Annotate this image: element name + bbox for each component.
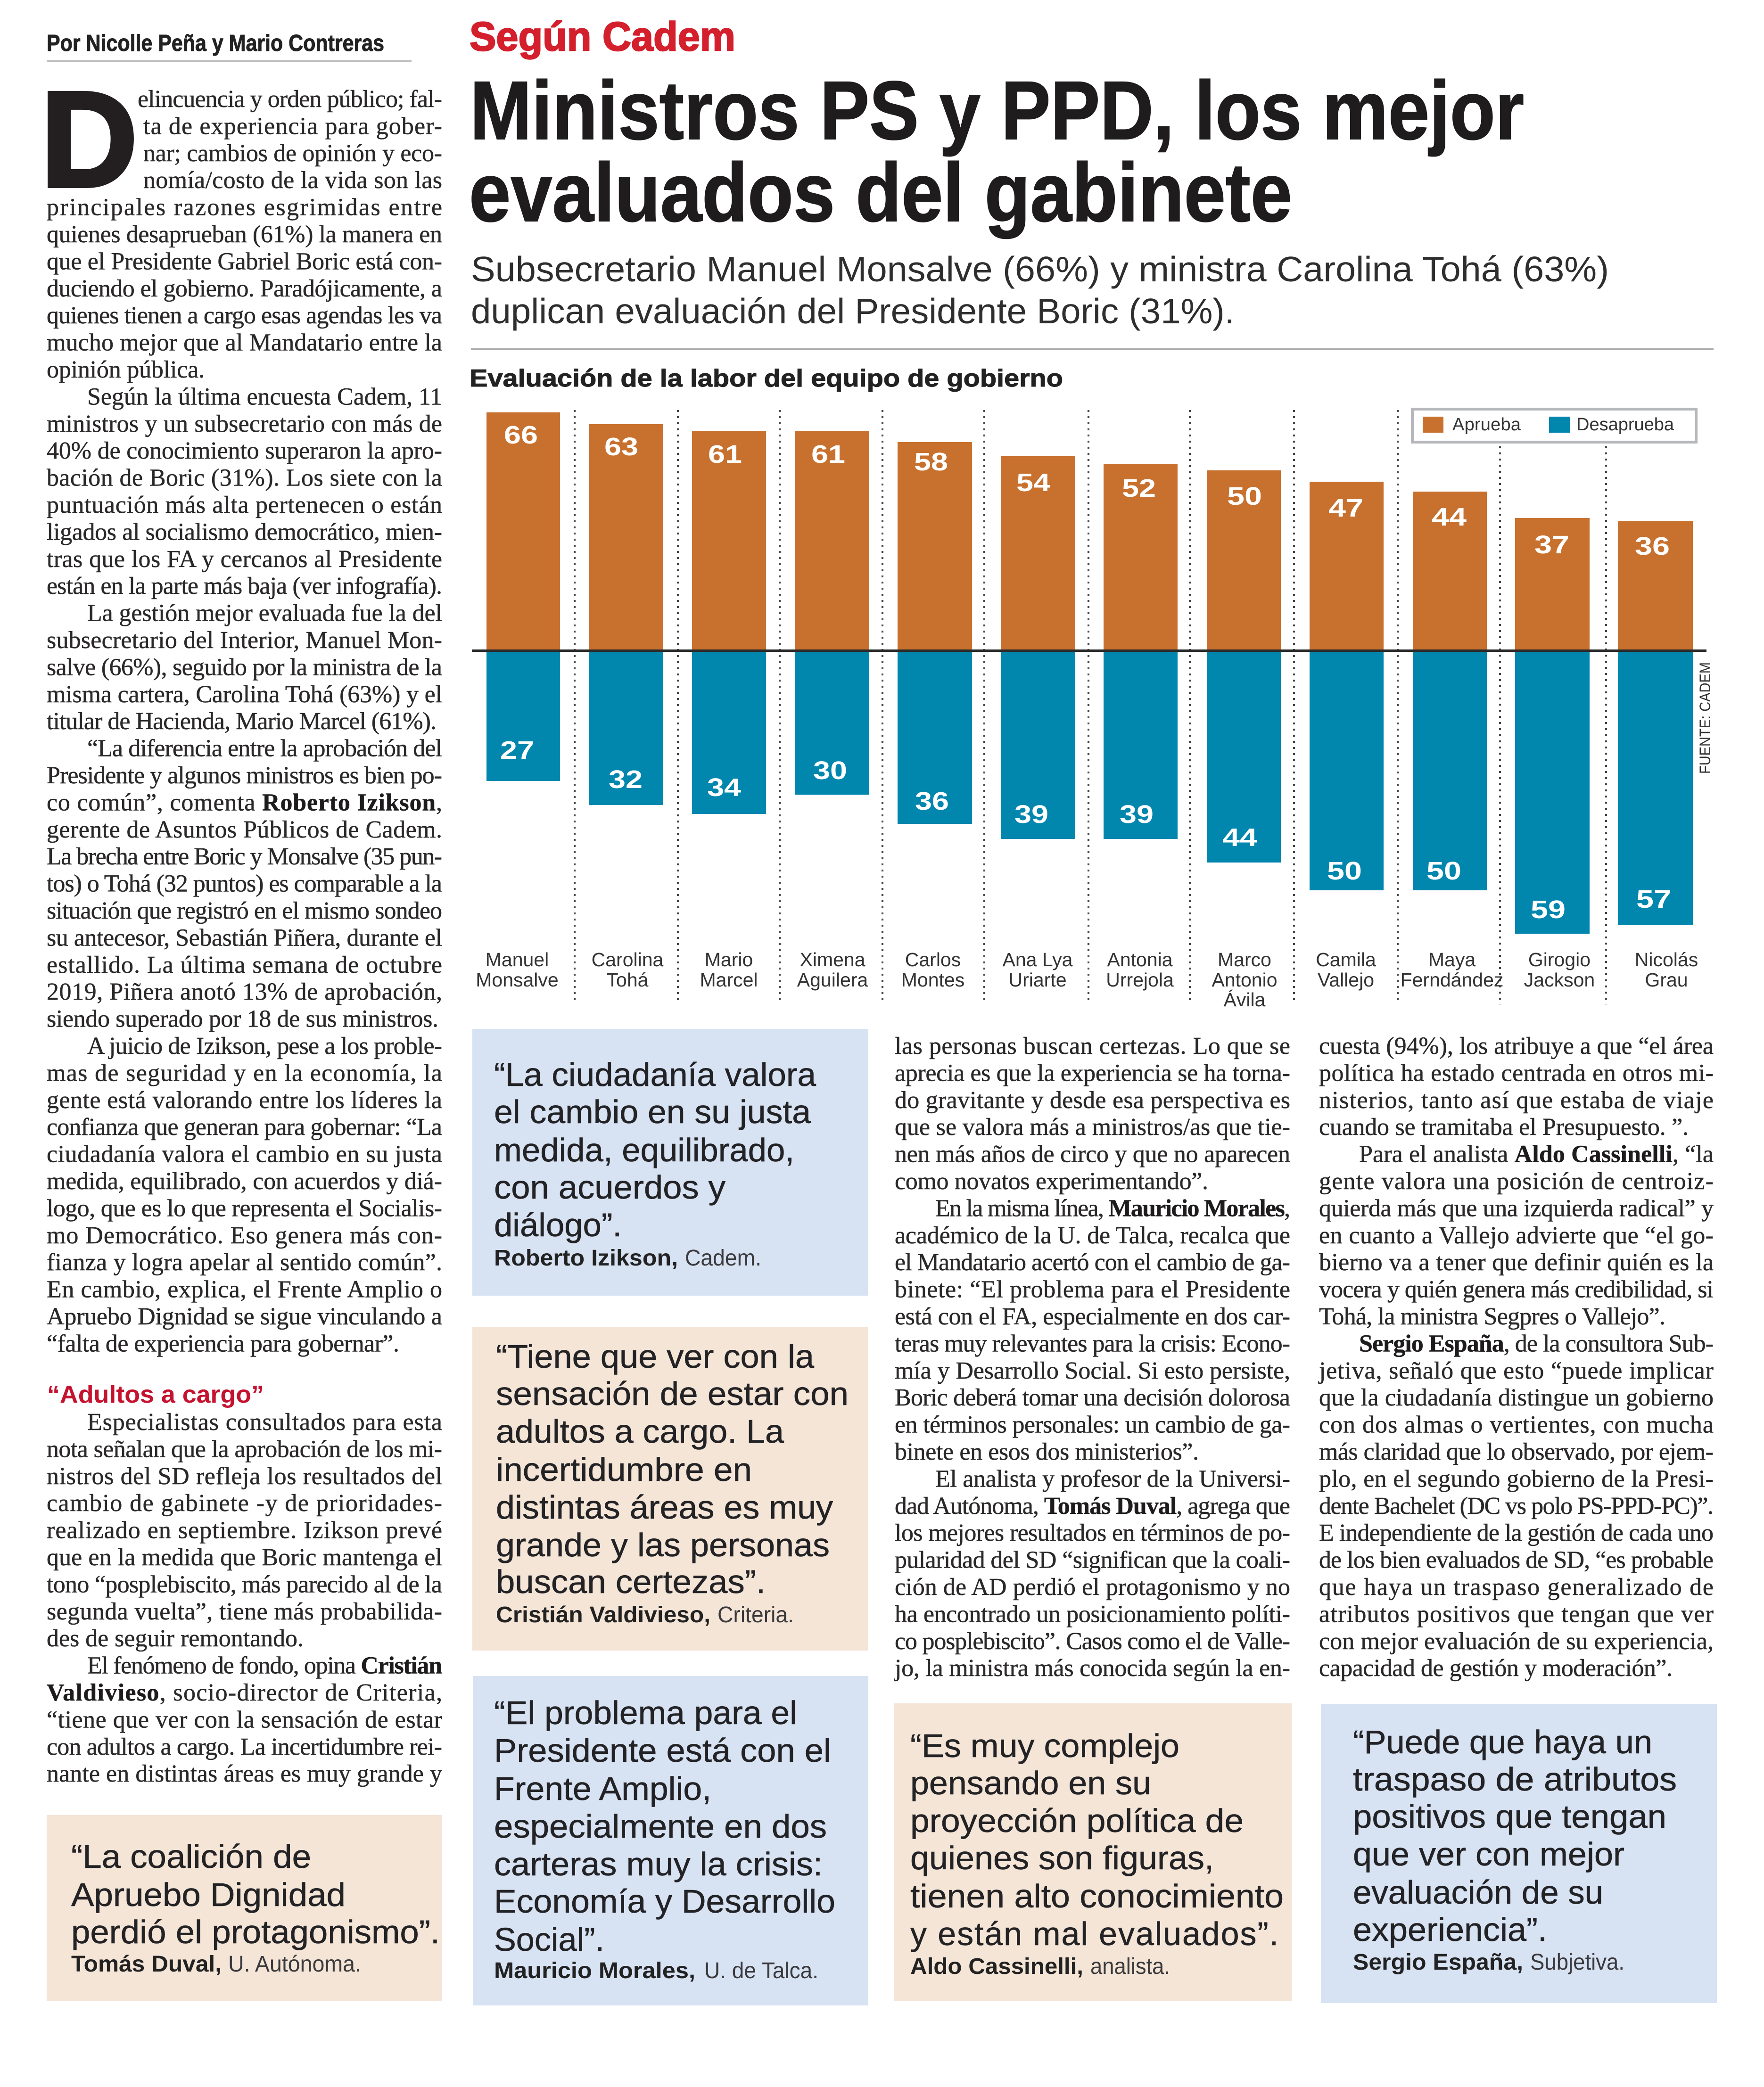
subtitle: duplican evaluación del Presidente Boric (31%). <box>471 291 1235 331</box>
article column 1, top: nar; cambios de opinión y eco- <box>143 140 442 167</box>
article column 3: el Mandatario acertó con el cambio de ga- <box>895 1249 1290 1276</box>
article column 3: que se valora más a ministros/as que tie- <box>895 1114 1290 1141</box>
bar group: Carolina Tohá: Tohá <box>607 969 649 991</box>
article column 1, top: 2019, Piñera anotó 13% de aprobación, <box>47 978 442 1005</box>
article column 1, bottom: segunda vuelta”, tiene más probabilida- <box>47 1598 442 1625</box>
bar group: Ximena Aguilera: Aguilera <box>797 969 868 991</box>
bar group: Maya Ferndández: 50 <box>1426 857 1461 885</box>
article column 1, top: ciudadanía valora el cambio en su justa <box>47 1141 442 1168</box>
subtitle: Subsecretario Manuel Monsalve (66%) y ministra Carolina Tohá (63%) <box>471 249 1609 289</box>
article column 3: en términos personales: un cambio de ga- <box>895 1412 1290 1438</box>
bar group: Manuel Monsalve: Monsalve <box>476 969 559 991</box>
quote box: Mauricio Morales: Mauricio Morales, <box>494 1958 695 1983</box>
article column 1, top: logo, que es lo que representa el Socialis- <box>47 1195 442 1222</box>
article column 4: de los bien evaluados de SD, “es probable <box>1319 1547 1714 1574</box>
bar group: Marco Antonio Ávila: Marco <box>1218 949 1271 970</box>
quote box: Mauricio Morales: Economía y Desarrollo <box>494 1883 835 1920</box>
article column 1, top: co común”, comenta Roberto Izikson, <box>47 789 442 816</box>
article column 4: gente valora una posición de centroiz- <box>1319 1168 1714 1195</box>
chart heading: Evaluación de la labor del equipo de gobierno <box>470 365 1063 392</box>
article column 3: los mejores resultados en términos de po- <box>895 1520 1290 1546</box>
bar group: Carlos Montes: Carlos <box>905 949 961 970</box>
article column 1, top: La brecha entre Boric y Monsalve (35 pun- <box>47 843 442 870</box>
article column 1, top: mo Democrático. Eso genera más con- <box>47 1222 442 1249</box>
article column 3: pularidad del SD “significan que la coali- <box>895 1547 1290 1574</box>
article column 3: académico de la U. de Talca, recalca que <box>895 1222 1290 1249</box>
bar group: Marco Antonio Ávila: 50 <box>1227 482 1262 510</box>
article column 1, top: En cambio, explica, el Frente Amplio o <box>47 1276 442 1303</box>
source note: FUENTE: CADEM <box>1697 662 1714 774</box>
bar group: Carlos Montes: 58 <box>914 448 948 476</box>
article column 3: El analista y profesor de la Universi- <box>935 1465 1290 1492</box>
article column 1, top: siendo superado por 18 de sus ministros. <box>47 1006 438 1033</box>
bar group: Camila Vallejo: 50 <box>1327 857 1362 885</box>
article column 1, top: elincuencia y orden público; fal- <box>138 86 442 113</box>
article column 1, top: titular de Hacienda, Mario Marcel (61%). <box>47 708 437 735</box>
article column 3: ción de AD perdió el protagonismo y no <box>895 1574 1290 1601</box>
title <box>469 65 1524 239</box>
quote box: Aldo Cassinelli: pensando en su <box>910 1765 1151 1801</box>
article column 1, top: puntuación más alta pertenecen o están <box>47 492 442 518</box>
article column 1, top: gente está valorando entre los líderes la <box>47 1087 442 1114</box>
bar group: Antonia Urrejola <box>1104 464 1178 991</box>
article column 1, top: gerente de Asuntos Públicos de Cadem. <box>47 816 442 843</box>
article column 1, top: A juicio de Izikson, pese a los proble- <box>87 1033 442 1060</box>
bar group: Manuel Monsalve <box>476 412 560 991</box>
article column 1, top: “falta de experiencia para gobernar”. <box>47 1330 399 1357</box>
title: evaluados del gabinete <box>469 147 1292 239</box>
quote box: Cristián Valdivieso: “Tiene que ver con la <box>496 1338 814 1375</box>
article column 1, top: Presidente y algunos ministros es bien po- <box>47 762 442 789</box>
bar group: Girogio Jackson: 59 <box>1531 896 1566 924</box>
article column 1, bottom: realizado en septiembre. Izikson prevé <box>47 1517 442 1544</box>
bar group: Ximena Aguilera: 30 <box>813 756 847 785</box>
bar group: Ana Lya Uriarte: 39 <box>1014 800 1048 829</box>
bar group: Antonia Urrejola: 52 <box>1122 474 1156 502</box>
article column 3: teras muy relevantes para la crisis: Econo- <box>895 1330 1290 1357</box>
quote box: Aldo Cassinelli: analista. <box>1090 1954 1170 1979</box>
bar group: Ximena Aguilera: 61 <box>811 440 845 468</box>
article column 3: está con el FA, especialmente en dos car- <box>895 1303 1290 1330</box>
bar group: Carlos Montes <box>898 442 972 991</box>
quote box: Cristián Valdivieso: sensación de estar con <box>496 1375 849 1412</box>
subheading: Adultos a cargo: “Adultos a cargo” <box>47 1381 264 1408</box>
bar group: Camila Vallejo <box>1310 482 1384 991</box>
quote box: Roberto Izikson: el cambio en su justa <box>494 1093 811 1130</box>
article column 4: que la ciudadanía distingue un gobierno <box>1319 1384 1714 1411</box>
quote box: Cristián Valdivieso: Criteria. <box>717 1602 794 1627</box>
quote box: Mauricio Morales: especialmente en dos <box>494 1808 827 1845</box>
bar group: Ana Lya Uriarte <box>1001 456 1075 991</box>
quote box: Aldo Cassinelli: quienes son figuras, <box>910 1840 1214 1876</box>
article column 1, top: mas de seguridad y en la economía, la <box>47 1060 442 1086</box>
bar group: Camila Vallejo: 47 <box>1328 494 1363 522</box>
bar group: Ana Lya Uriarte: Ana Lya <box>1003 949 1073 970</box>
article column 3 <box>894 1033 1290 1682</box>
article column 1, top: Según la última encuesta Cadem, 11 <box>87 383 442 410</box>
bar group: Marco Antonio Ávila: 44 <box>1222 823 1257 852</box>
article column 4: dente Bachelet (DC vs polo PS-PPD-PC)”. <box>1319 1493 1714 1520</box>
article column 1, top: su antecesor, Sebastián Piñera, durante el <box>47 924 442 951</box>
article column 3: nen más años de circo y que no aparecen <box>895 1141 1290 1168</box>
article column 1, top: están en la parte más baja (ver infografía). <box>47 573 442 600</box>
article column 4: cuesta (94%), los atribuye a que “el área <box>1319 1033 1714 1060</box>
quote box: Aldo Cassinelli: Aldo Cassinelli, <box>910 1954 1083 1979</box>
bar group: Carolina Tohá: Carolina <box>592 949 664 970</box>
quote box: Sergio España: traspaso de atributos <box>1353 1761 1677 1798</box>
article column 4: Tohá, la ministra Segpres o Vallejo”. <box>1319 1303 1665 1330</box>
article column 1, top: mucho mejor que al Mandatario entre la <box>47 329 442 356</box>
article column 1, top: opinión pública. <box>47 356 205 383</box>
quote box: Roberto Izikson <box>472 1029 868 1296</box>
bar group: Maya Ferndández <box>1401 492 1503 991</box>
quote box: Sergio España: positivos que tengan <box>1353 1798 1666 1835</box>
quote box: Cristián Valdivieso: incertidumbre en <box>496 1451 752 1488</box>
article column 4: Sergio España, de la consultora Sub- <box>1359 1330 1714 1357</box>
quote box: Mauricio Morales: U. de Talca. <box>704 1958 818 1983</box>
article column 1, bottom: nota señalan que la aprobación de los mi- <box>47 1436 442 1463</box>
article column 3: aprecia es que la experiencia se ha torna- <box>895 1060 1290 1086</box>
article column 1, top: La gestión mejor evaluada fue la del <box>87 600 442 627</box>
article column 1, top: duciendo el gobierno. Paradójicamente, a <box>47 275 442 302</box>
article column 1, bottom: nistros del SD refleja los resultados del <box>47 1463 442 1490</box>
article column 1, bottom: El fenómeno de fondo, opina Cristián <box>87 1652 442 1679</box>
article column 1, top: que el Presidente Gabriel Boric está con- <box>47 248 442 275</box>
article column 3: mía y Desarrollo Social. Si esto persiste, <box>895 1357 1290 1384</box>
article column 1, top: tos) o Tohá (32 puntos) es comparable a la <box>47 871 442 897</box>
article column 3: binete: “El problema para el Presidente <box>895 1276 1290 1303</box>
bar group: Nicolás Grau: Grau <box>1645 969 1688 991</box>
quote box: Mauricio Morales: “El problema para el <box>494 1694 797 1731</box>
article column 1, top: nomía/costo de la vida son las <box>143 167 442 194</box>
bar group: Girogio Jackson: Girogio <box>1528 949 1591 970</box>
bar group: Marco Antonio Ávila <box>1207 470 1281 1011</box>
quote box: Roberto Izikson: diálogo”. <box>494 1207 622 1243</box>
bar group: Ximena Aguilera: Ximena <box>800 949 866 970</box>
bar group: Carolina Tohá: 32 <box>609 765 643 794</box>
article column 4: nisterios, tanto así que estaba de viaje <box>1319 1087 1714 1114</box>
bar group: Nicolás Grau: Nicolás <box>1635 949 1698 970</box>
quote box: Cristián Valdivieso: Cristián Valdivieso, <box>496 1602 710 1627</box>
quote box: Sergio España: Sergio España, <box>1353 1950 1523 1975</box>
bar group: Carlos Montes: Montes <box>901 969 964 991</box>
quote box: Aldo Cassinelli <box>894 1703 1292 2001</box>
quote box: Aldo Cassinelli: proyección política de <box>910 1802 1244 1839</box>
bar group: Carlos Montes: 36 <box>915 787 949 815</box>
article column 4: política ha estado centrada en otros mi- <box>1319 1060 1714 1086</box>
article column 1, top: situación que registró en el mismo sondeo <box>47 897 442 924</box>
article column 4: en cuanto a Vallejo advierte que “el go- <box>1319 1222 1714 1249</box>
quote box: Cristián Valdivieso: buscan certezas”. <box>496 1563 766 1600</box>
article column 1, bottom: des de seguir remontando. <box>47 1625 304 1652</box>
quote box: Aldo Cassinelli: “Es muy complejo <box>910 1727 1179 1764</box>
quote box: Sergio España: que ver con mejor <box>1353 1836 1624 1873</box>
bar group: Marco Antonio Ávila: Antonio <box>1212 969 1278 991</box>
article column 3: las personas buscan certezas. Lo que se <box>895 1033 1290 1060</box>
bar group: Camila Vallejo: Vallejo <box>1318 969 1374 991</box>
bar group: Maya Ferndández: 44 <box>1432 503 1467 531</box>
bar group: Ana Lya Uriarte: 54 <box>1016 468 1050 497</box>
article column 3: co posplebiscito”. Casos como el de Valle- <box>895 1628 1290 1655</box>
quote box: Cristián Valdivieso: grande y las personas <box>496 1527 830 1563</box>
quote box: Roberto Izikson: con acuerdos y <box>494 1169 725 1206</box>
legend: Aprueba <box>1452 415 1521 435</box>
quote box: Mauricio Morales: Presidente está con el <box>494 1732 831 1769</box>
article column 1, top: medida, equilibrado, con acuerdos y diá- <box>47 1168 442 1195</box>
quote box: Sergio España: evaluación de su <box>1353 1874 1603 1911</box>
quote box: Sergio España: Subjetiva. <box>1530 1950 1624 1975</box>
quote box: Mauricio Morales <box>473 1676 868 2005</box>
article column 3: ha encontrado un posicionamiento políti- <box>895 1601 1290 1627</box>
article column 1, top: 40% de conocimiento superaron la apro- <box>47 437 442 464</box>
article column 1, top: estallido. La última semana de octubre <box>47 952 442 978</box>
article column 4: vocera y quién genera más credibilidad, si <box>1319 1276 1714 1303</box>
quote box: Sergio España <box>1321 1704 1717 2003</box>
article column 1, top: subsecretario del Interior, Manuel Mon- <box>47 627 442 654</box>
bar group: Ana Lya Uriarte: Uriarte <box>1008 969 1067 991</box>
article column 1, top: quienes desaprueban (61%) la manera en <box>47 221 442 248</box>
bar group: Mario Marcel: Marcel <box>700 969 758 991</box>
article column 1, bottom: nante en distintas áreas es muy grande y <box>47 1760 442 1787</box>
quote box: Cristián Valdivieso: adultos a cargo. La <box>496 1413 784 1450</box>
article column 4: quierda más que una izquierda radical” y <box>1319 1195 1714 1222</box>
bar group: Carolina Tohá <box>589 424 664 991</box>
article column 3: En la misma línea, Mauricio Morales, <box>935 1195 1290 1222</box>
article column 4: E independiente de la gestión de cada uno <box>1319 1520 1714 1546</box>
quote box: Tomás Duval: “La coalición de <box>71 1838 311 1875</box>
quote box: Cristián Valdivieso <box>472 1327 868 1651</box>
bar group: Mario Marcel: 61 <box>708 440 742 468</box>
bar group: Antonia Urrejola: Antonia <box>1107 949 1173 970</box>
subtitle <box>471 249 1609 331</box>
article column 1, bottom: cambio de gabinete -y de prioridades- <box>47 1490 442 1517</box>
article column 4: que haya un traspaso generalizado de <box>1319 1574 1714 1601</box>
article column 1, top: salve (66%), seguido por la ministra de la <box>47 654 442 681</box>
quote box: Tomás Duval <box>47 1815 442 2001</box>
article column 1, top: ministros y un subsecretario con más de <box>47 411 442 437</box>
quote box: Roberto Izikson: “La ciudadanía valora <box>494 1056 816 1093</box>
byline: Por Nicolle Peña y Mario Contreras <box>47 31 384 56</box>
legend <box>1412 409 1696 442</box>
article column 4 <box>1318 1033 1714 1682</box>
article column 4: plo, en el segundo gobierno de la Presi- <box>1319 1465 1714 1492</box>
quote box: Sergio España: “Puede que haya un <box>1353 1724 1652 1760</box>
article column 1, bottom: con adultos a cargo. La incertidumbre rei- <box>47 1734 442 1760</box>
article column 1, top: ligados al socialismo democrático, mien- <box>47 518 442 545</box>
article column 4: Para el analista Aldo Cassinelli, “la <box>1359 1141 1714 1168</box>
article column 4: atributos positivos que tengan que ver <box>1319 1601 1714 1627</box>
article column 1, bottom: que en la medida que Boric mantenga el <box>47 1544 442 1571</box>
article column 1, top: quienes tienen a cargo esas agendas les va <box>47 302 442 329</box>
bar group: Maya Ferndández: Ferndández <box>1401 969 1503 991</box>
article column 1, top: confianza que generan para gobernar: “La <box>47 1114 442 1141</box>
bar group: Girogio Jackson: Jackson <box>1524 969 1595 991</box>
bar group: Mario Marcel <box>692 431 766 991</box>
article column 1, top: “La diferencia entre la aprobación del <box>87 735 442 762</box>
title: Ministros PS y PPD, los mejor <box>470 65 1524 157</box>
bar group: Maya Ferndández: Maya <box>1428 949 1475 970</box>
bar group: Manuel Monsalve: 66 <box>504 421 538 449</box>
bar group: Marco Antonio Ávila: Ávila <box>1224 989 1266 1011</box>
quote box: Mauricio Morales: Frente Amplio, <box>494 1770 711 1807</box>
bar group: Antonia Urrejola: Urrejola <box>1106 969 1174 991</box>
article column 3: Boric deberá tomar una decisión dolorosa <box>895 1384 1290 1411</box>
article column 3: jo, la ministra más conocida según la en- <box>894 1655 1290 1682</box>
chart: approval and disapproval by minister <box>472 409 1714 1011</box>
article column 4: cuando se tramitaba el Presupuesto. ”. <box>1319 1114 1689 1141</box>
article column 1, top: tras que los FA y cercanos al Presidente <box>47 546 442 573</box>
article column 1, top: principales razones esgrimidas entre <box>47 194 442 221</box>
bar group: Girogio Jackson: 37 <box>1534 531 1569 559</box>
article column 1, top: misma cartera, Carolina Tohá (63%) y el <box>47 681 442 708</box>
bar group: Ximena Aguilera <box>795 431 869 991</box>
article column 3: dad Autónoma, Tomás Duval, agrega que <box>895 1493 1290 1520</box>
article column 4: más claridad que lo observado, por ejem- <box>1319 1438 1714 1465</box>
article column 4: capacidad de gestión y moderación”. <box>1319 1655 1673 1682</box>
article column 1, top: fianza y logra apelar al sentido común”. <box>47 1249 442 1276</box>
article column 3: como novatos experimentando”. <box>895 1168 1208 1195</box>
drop cap D: D <box>41 64 138 215</box>
article column 1, bottom: Especialistas consultados para esta <box>87 1409 442 1436</box>
article column 4: bierno va a tener que definir quién es la <box>1319 1249 1714 1276</box>
quote box: Aldo Cassinelli: tienen alto conocimiento <box>910 1878 1284 1914</box>
bar group: Manuel Monsalve: Manuel <box>486 949 549 970</box>
bar group: Carolina Tohá: 63 <box>604 433 638 461</box>
article column 1, top: ta de experiencia para gober- <box>143 113 442 140</box>
quote box: Cristián Valdivieso: distintas áreas es muy <box>496 1489 833 1526</box>
bar group: Nicolás Grau: 57 <box>1636 885 1671 913</box>
bar group: Antonia Urrejola: 39 <box>1120 800 1154 829</box>
bar group: Girogio Jackson <box>1515 518 1595 991</box>
article column 1, top: Apruebo Dignidad se sigue vinculando a <box>47 1303 442 1330</box>
bar group: Mario Marcel: Mario <box>705 949 753 970</box>
bar group: Camila Vallejo: Camila <box>1316 949 1376 970</box>
quote box: Tomás Duval: perdió el protagonismo”. <box>71 1914 440 1950</box>
article column 1, bottom: Valdivieso, socio-director de Criteria, <box>47 1679 442 1706</box>
bar group: Mario Marcel: 34 <box>707 773 741 802</box>
article column 1, top: bación de Boric (31%). Los siete con la <box>47 465 442 492</box>
quote box: Tomás Duval: Apruebo Dignidad <box>71 1876 346 1913</box>
quote box: Mauricio Morales: carteras muy la crisis: <box>494 1846 823 1882</box>
article column 3: binete en esos dos ministerios”. <box>895 1438 1199 1465</box>
quote box: Tomás Duval: Tomás Duval, <box>71 1952 222 1977</box>
article column 3: do gravitante y desde esa perspectiva es <box>895 1087 1290 1114</box>
kicker: Según Cadem <box>470 14 735 59</box>
article column 4: jetiva, señaló que esto “puede implicar <box>1318 1357 1714 1384</box>
bar group: Manuel Monsalve: 27 <box>500 736 534 764</box>
article column 4: con dos almas o vertientes, con mucha <box>1319 1412 1714 1438</box>
quote box: Roberto Izikson: Cadem. <box>685 1246 761 1271</box>
quote box: Mauricio Morales: Social”. <box>494 1921 604 1958</box>
quote box: Roberto Izikson: Roberto Izikson, <box>494 1246 678 1271</box>
bar group: Nicolás Grau <box>1618 521 1698 991</box>
quote box: Sergio España: experiencia”. <box>1353 1911 1547 1948</box>
quote box: Aldo Cassinelli: y están mal evaluados”. <box>910 1915 1278 1952</box>
article column 1, bottom: “tiene que ver con la sensación de estar <box>47 1706 442 1733</box>
article column 4: con mejor evaluación de su experiencia, <box>1319 1628 1714 1655</box>
bar group: Nicolás Grau: 36 <box>1635 532 1670 560</box>
article column 1, bottom <box>47 1409 442 1787</box>
article column 1, top <box>47 86 442 1357</box>
legend: Desaprueba <box>1576 415 1674 435</box>
quote box: Roberto Izikson: medida, equilibrado, <box>494 1132 794 1168</box>
quote box: Tomás Duval: U. Autónoma. <box>228 1952 361 1977</box>
article column 1, bottom: tono “posplebiscito, más parecido al de la <box>47 1571 442 1598</box>
